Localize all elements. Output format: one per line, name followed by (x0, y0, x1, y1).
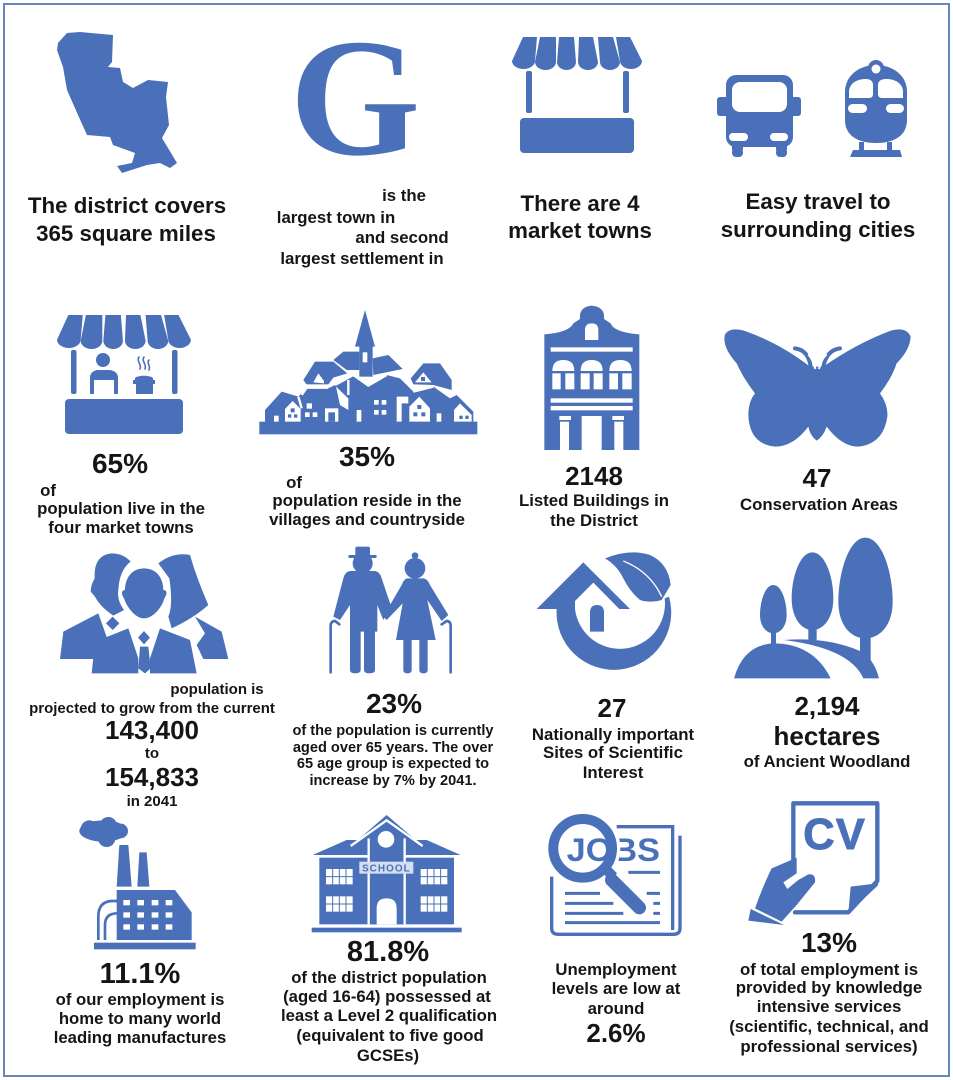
stat: 27: 27 (598, 693, 626, 723)
panel: listed buildings (519, 306, 669, 530)
text: market towns: market towns (508, 218, 652, 243)
icon: district map (57, 32, 177, 173)
text: knowledge employment description: of total employment is (740, 960, 918, 979)
text: older population: 65 age group is expected to (297, 756, 489, 772)
text: largest town description: is the (382, 186, 426, 205)
stat: 143,400: 143,400 (105, 715, 199, 745)
icon: trees (734, 538, 893, 678)
stat: 2148: 2148 (565, 461, 623, 491)
icon: elderly couple (331, 547, 451, 673)
icon: village (259, 310, 477, 434)
text: qualifications description: GCSEs) (357, 1046, 419, 1065)
icon: jobs newspaper (547, 813, 680, 934)
stat: 2.6%: 2.6% (586, 1018, 646, 1048)
text: qualifications description: (aged 16-64) possessed at (283, 987, 491, 1006)
panel: village population (259, 310, 477, 529)
text: village share: population reside in the (272, 491, 462, 510)
icon: CV in hand (748, 803, 878, 925)
text: knowledge employment description: provided by knowledge (736, 978, 922, 997)
stat: 13%: 13% (801, 927, 857, 958)
panel: knowledge employment (729, 803, 929, 1056)
stat: 2,194 hectares: 2,194 (794, 691, 860, 721)
text: district size: 365 square miles (36, 221, 216, 246)
panel: unemployment (547, 813, 681, 1048)
text: knowledge employment description: (scientific, technical, and (729, 1017, 929, 1036)
text: district size: The district covers (28, 193, 226, 218)
icon: school: SCHOOL (362, 863, 411, 874)
panel: older people (292, 547, 494, 789)
text: older population: increase by 7% by 2041. (309, 773, 477, 789)
icon: factory (79, 817, 196, 949)
stat: 23%: 23% (366, 688, 422, 719)
stat: 11.1%: 11.1% (100, 958, 181, 990)
icon: bus (717, 75, 801, 157)
text: qualifications description: of the district population (291, 968, 487, 987)
panel: sites of scientific interest (532, 552, 695, 782)
stat: 2,194 hectares: hectares (774, 721, 880, 751)
text: village share: of (286, 473, 302, 492)
text: sites description: Sites of Scientific (543, 743, 683, 762)
panel: conservation areas (724, 329, 911, 514)
text: largest town description: largest town in (277, 208, 395, 227)
text: population projection: projected to grow from the current (29, 700, 275, 717)
text: ancient woodland: of Ancient Woodland (744, 752, 910, 771)
icon: CV in hand: CV (803, 811, 866, 859)
stat: 154,833: 154,833 (105, 762, 199, 792)
text: qualifications description: (equivalent to five good (296, 1026, 484, 1045)
icon: listed building (544, 306, 639, 450)
icon: butterfly (724, 329, 911, 447)
panel: manufacturing (54, 817, 226, 1047)
panel: market towns (508, 37, 652, 243)
text: conservation areas: Conservation Areas (740, 495, 898, 514)
icon: market stall (512, 37, 642, 153)
text: employment description: of our employment is (56, 990, 224, 1009)
text: employment description: leading manufactures (54, 1028, 226, 1047)
stat: 47: 47 (803, 463, 831, 493)
icon: jobs newspaper: JOBS (567, 832, 660, 868)
text: knowledge employment description: intensive services (757, 997, 901, 1016)
icon: house and leaf (537, 552, 671, 670)
text: largest town description: and second (355, 228, 449, 247)
text: to: to (145, 745, 159, 762)
text: sites description: Nationally important (532, 725, 695, 744)
text: travel: Easy travel to (745, 189, 891, 214)
panel: largest town (277, 5, 449, 268)
text: market town share: of (40, 481, 56, 500)
text: in 2041: in 2041 (127, 793, 177, 810)
text: older population: aged over 65 years. The over (293, 740, 493, 756)
stat: 81.8%: 81.8% (347, 936, 429, 968)
panel: population growth (29, 553, 275, 810)
panel: qualifications (281, 815, 497, 1065)
icon: train (845, 60, 907, 157)
text: employment description: home to many world (59, 1009, 221, 1028)
text: sites description: Interest (583, 763, 644, 782)
text: travel: surrounding cities (721, 217, 915, 242)
panel: travel (717, 60, 915, 242)
stat: 35%: 35% (339, 441, 395, 472)
text: listed buildings: Listed Buildings in (519, 491, 669, 510)
text: older population: of the population is currently (292, 723, 494, 739)
panel: ancient woodland (734, 538, 910, 771)
text: market towns: There are 4 (520, 191, 640, 216)
text: knowledge employment description: professional services) (740, 1037, 918, 1056)
text: unemployment description: Unemployment (555, 960, 677, 979)
icon: three people (60, 553, 228, 673)
panel: district area (28, 32, 226, 246)
panel: market town population (37, 315, 205, 537)
text: market town share: population live in the (37, 499, 205, 518)
text: qualifications description: least a Level 2 qualification (281, 1006, 497, 1025)
icon: letter G: G (290, 5, 420, 191)
icon: school (312, 815, 462, 932)
text: listed buildings: the District (550, 511, 638, 530)
stat: 65%: 65% (92, 448, 148, 479)
text: population projection: population is (170, 681, 264, 698)
text: village share: villages and countryside (269, 510, 465, 529)
text: largest town description: largest settlement in (280, 249, 444, 268)
text: unemployment description: levels are low at (552, 979, 681, 998)
text: market town share: four market towns (48, 518, 194, 537)
icon: food stall (57, 315, 191, 434)
text: unemployment description: around (588, 999, 644, 1018)
